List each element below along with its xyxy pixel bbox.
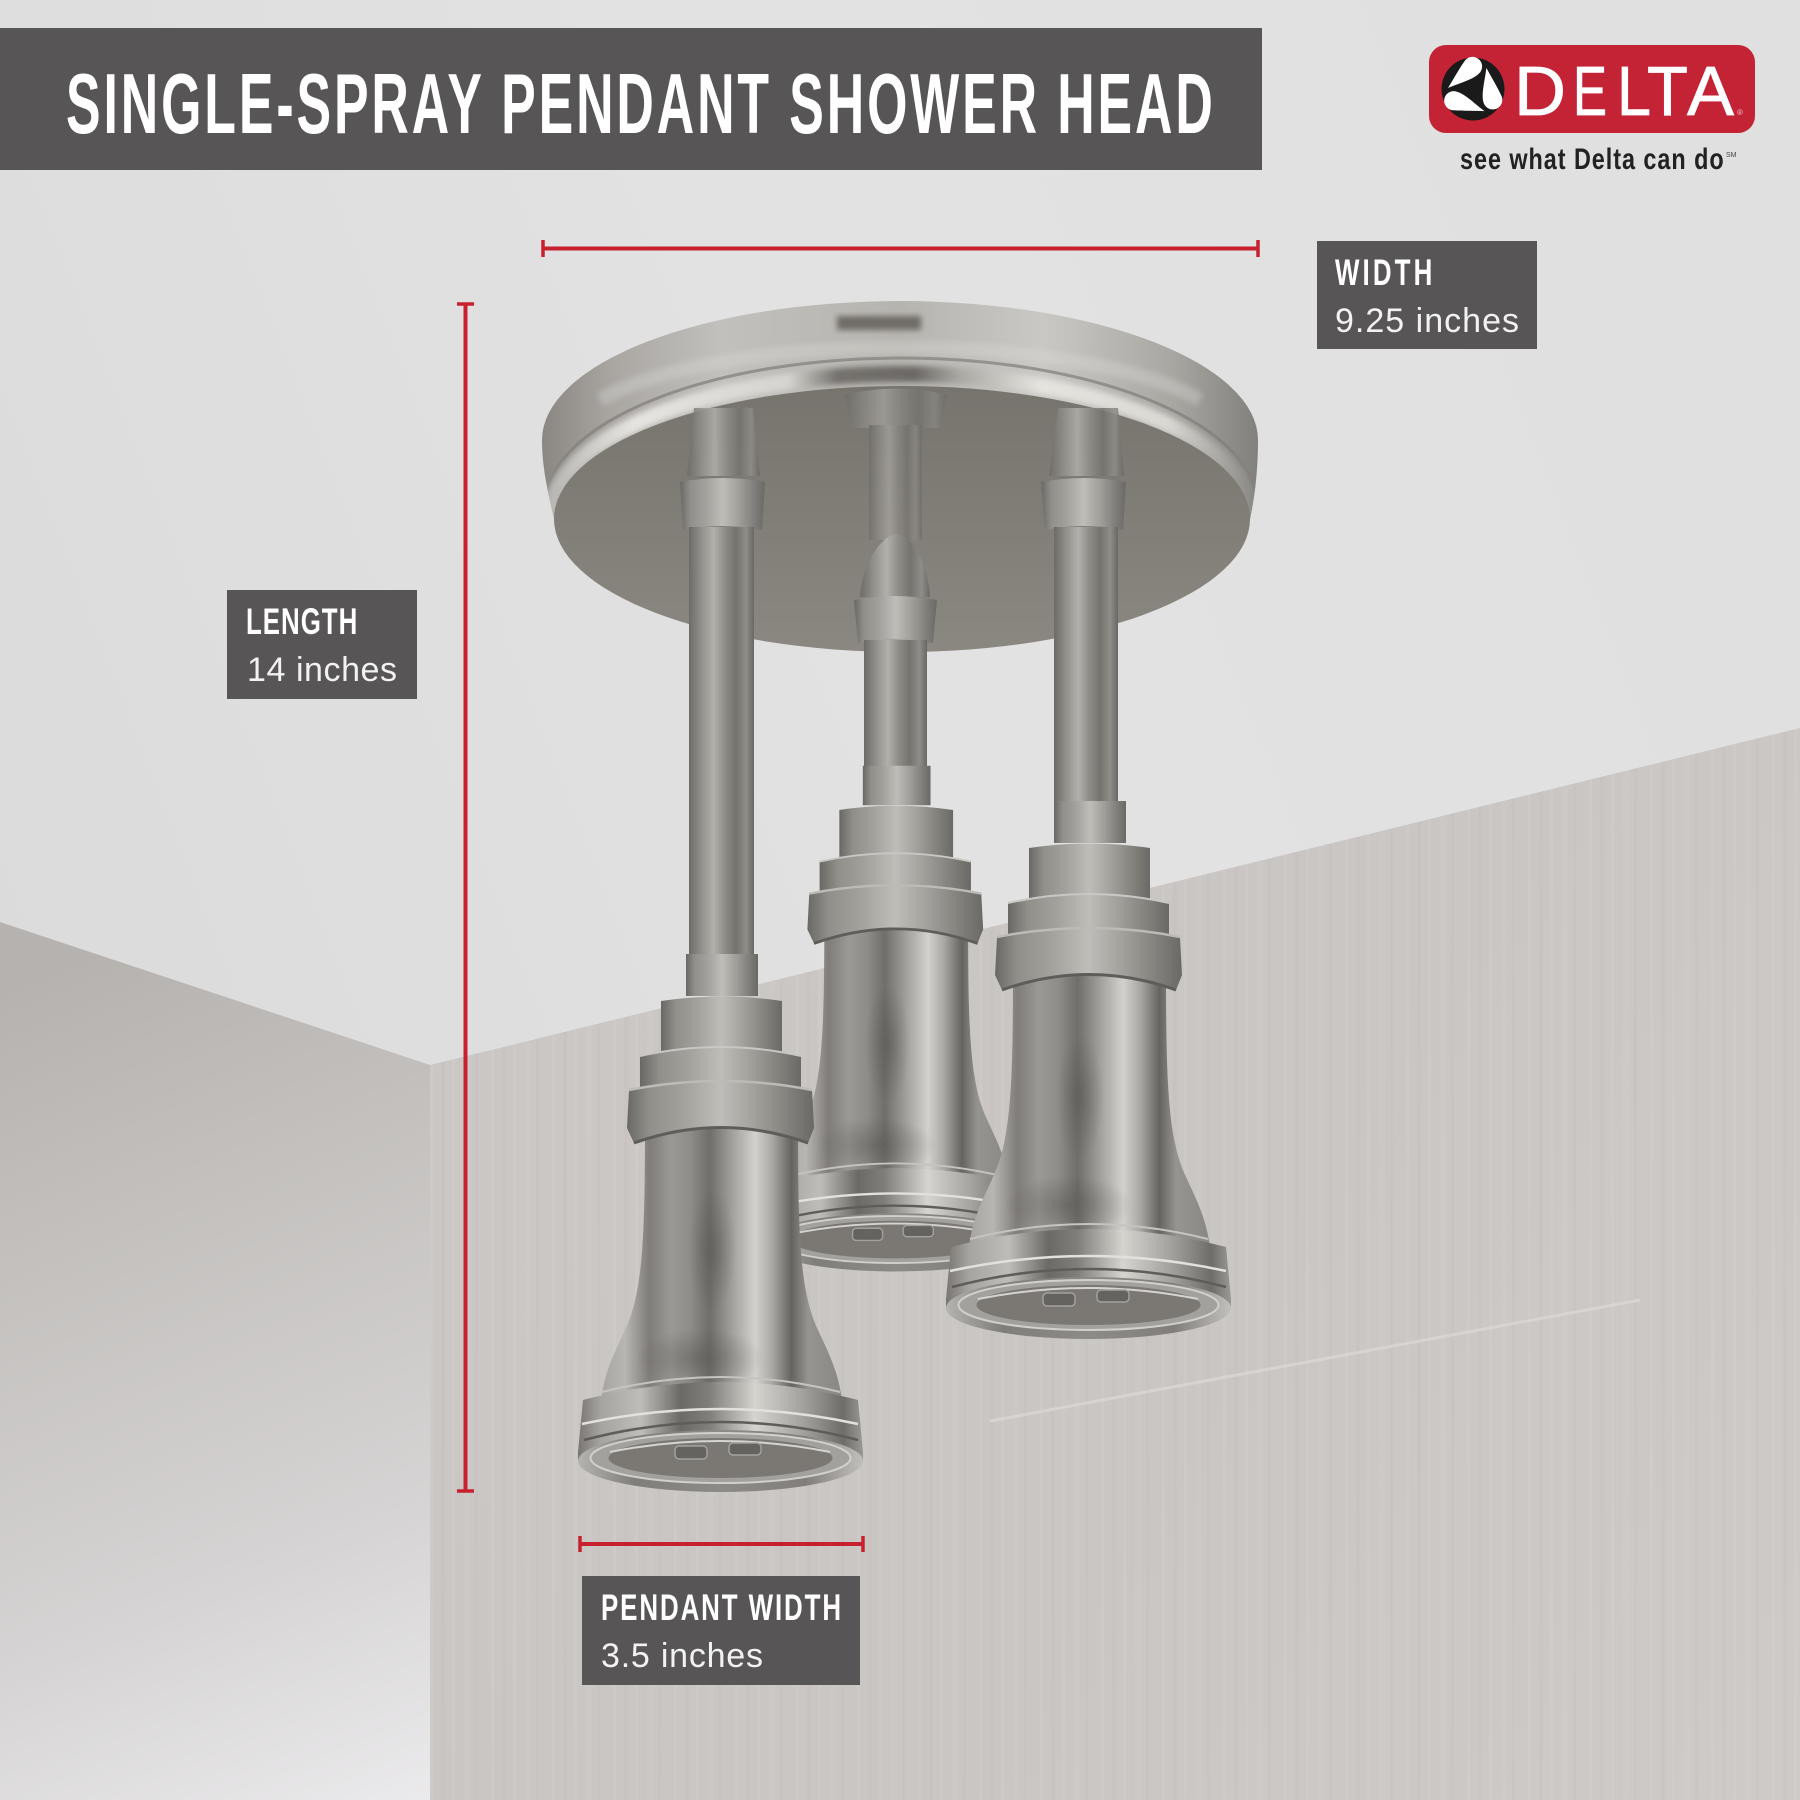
- pendant width label: PENDANT WIDTH: [601, 1586, 841, 1628]
- pendant: rear centre: [761, 766, 1029, 1271]
- length label: 14 inches: [247, 651, 397, 689]
- plate face: [554, 386, 1250, 652]
- pendant width dimension line: [579, 1536, 863, 1552]
- pendant: right: [946, 801, 1231, 1339]
- width label: [1317, 241, 1537, 349]
- ceiling plate: [542, 301, 1258, 662]
- pendant width label: [582, 1576, 860, 1685]
- length dimension line: [457, 303, 474, 1491]
- right tiled wall: [430, 728, 1800, 1800]
- rim reflection: [837, 316, 921, 330]
- centre pipe: [854, 534, 937, 770]
- left pipe: [680, 408, 765, 959]
- tagline: see what Delta can do: [1460, 142, 1724, 176]
- logo wordmark: A: [1687, 52, 1734, 130]
- width label: WIDTH: [1335, 251, 1432, 293]
- shower head: [542, 301, 1258, 1492]
- width label: 9.25 inches: [1335, 302, 1519, 340]
- logo wordmark: T: [1647, 52, 1688, 130]
- right pipe: [1041, 408, 1126, 807]
- logo wordmark: E: [1573, 52, 1607, 130]
- logo wordmark: L: [1617, 52, 1651, 130]
- ceiling background: [0, 0, 1800, 1065]
- left wall: [0, 922, 430, 1800]
- pendant: front left: [578, 954, 863, 1492]
- width dimension line: [542, 240, 1258, 257]
- length label: LENGTH: [246, 600, 357, 642]
- logo icon: triangle in circle: [1441, 57, 1513, 127]
- title banner: [0, 28, 1262, 170]
- title: SINGLE-SPRAY PENDANT SHOWER HEAD: [66, 56, 1213, 151]
- logo wordmark: D: [1514, 52, 1566, 130]
- logo wordmark: [1514, 52, 1734, 130]
- length label: [227, 590, 417, 699]
- tagline: SM: [1726, 152, 1737, 159]
- centre rear pipe on plate: [845, 388, 947, 540]
- pendant width label: 3.5 inches: [601, 1637, 763, 1675]
- Delta logo: [1429, 45, 1755, 133]
- registered mark: ®: [1737, 108, 1743, 117]
